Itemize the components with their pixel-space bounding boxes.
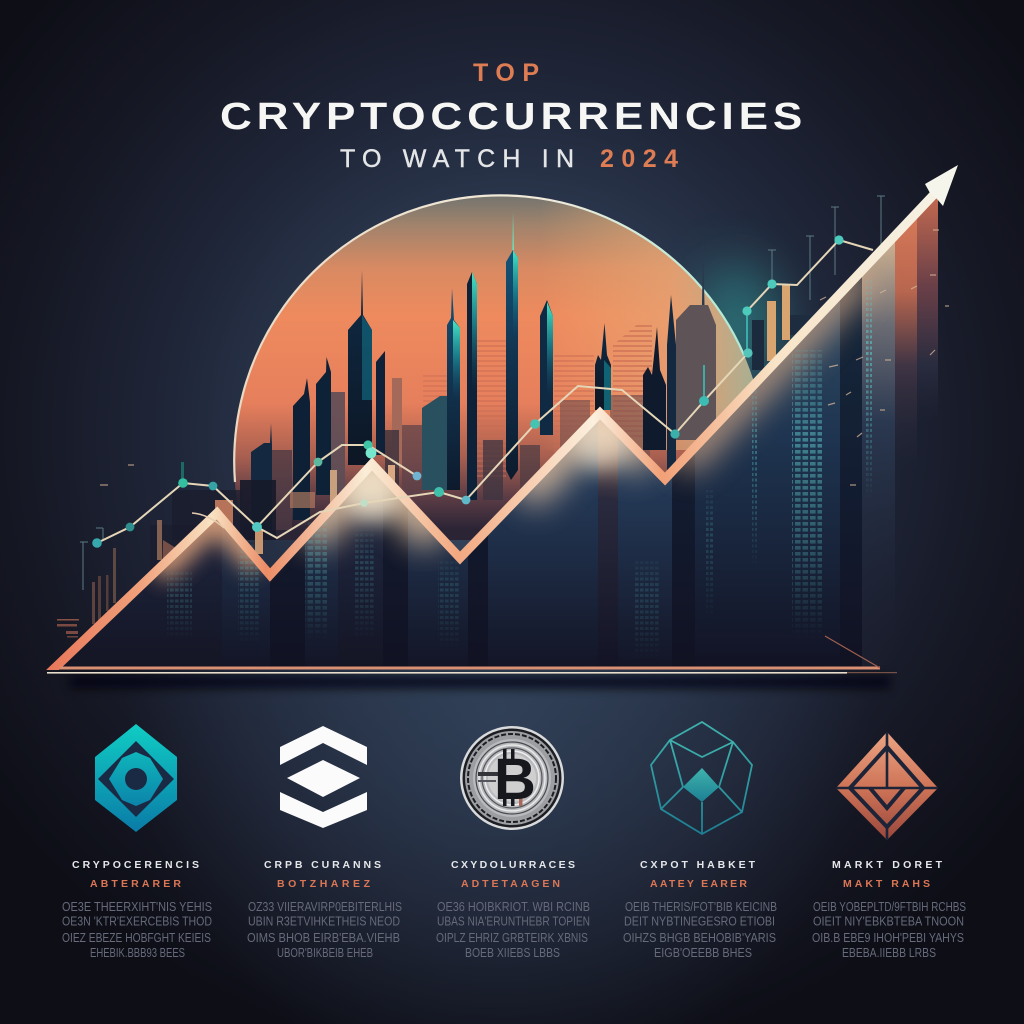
body copy: OIEIT NIY'EBKBTEBA TNOON <box>813 914 964 928</box>
skyline towers <box>251 212 716 530</box>
icon: teal hexagon <box>95 724 177 832</box>
icon: white chevrons <box>280 726 367 828</box>
window grids <box>167 280 872 660</box>
arrow head <box>925 165 958 206</box>
caption column 2 <box>247 859 402 960</box>
main zigzag line <box>40 188 940 682</box>
sun disc <box>230 190 760 540</box>
thin gauge lines <box>80 196 885 590</box>
body copy: EBEBA.IIEBB LRBS <box>842 945 936 960</box>
heading: MARKT DORET <box>832 859 943 871</box>
body copy: OEIB THERIS/FOT'BIB KEICINB <box>625 899 777 914</box>
body copy: OE3E THEERXIHT'NIS YEHIS <box>62 899 212 914</box>
heading: CRPB CURANNS <box>264 859 381 871</box>
icon row <box>95 722 938 840</box>
body copy: EHEBIK.BBB93 BEES <box>90 945 185 960</box>
body copy: OIB.B EBE9 IHOH'PEBI YAHYS <box>812 930 964 945</box>
left dark city <box>57 462 395 638</box>
sparks <box>100 230 949 485</box>
icon: silver bitcoin coin <box>460 726 564 830</box>
subheading: BOTZHAREZ <box>277 878 371 890</box>
heading: CXYDOLURRACES <box>451 859 575 871</box>
baseline rules <box>47 636 897 674</box>
teal glow behind sun <box>698 263 778 387</box>
subtitle year: 2024 <box>600 145 678 173</box>
caption column 5 <box>812 859 966 960</box>
body copy <box>62 899 212 960</box>
subheading: AATEY EARER <box>650 878 747 890</box>
subheading: ABTERARER <box>90 878 181 890</box>
icon: teal polyhedron <box>651 722 752 834</box>
body copy: BOEB XIIEBS LBBS <box>465 945 560 960</box>
body copy <box>623 899 777 960</box>
body copy: OE3N 'KTR'EXERCEBIS THOD <box>62 914 212 928</box>
body copy: OZ33 VIIERAVIRP0EBITERLHIS <box>248 899 402 914</box>
icon: copper diamond <box>836 732 938 840</box>
body copy: DEIT NYBTINEGESRO ETIOBI <box>624 914 775 928</box>
icon: silver bitcoin coin: B <box>494 747 536 812</box>
body copy <box>247 899 402 960</box>
body copy: OEIB YOBEPLTD/9FTBIH RCHBS <box>813 899 966 914</box>
faint city <box>272 322 652 530</box>
body copy: OIHZS BHGB BEHOBIB'YARIS <box>623 930 776 945</box>
body copy: EIGB'OEEBB BHES <box>654 945 752 960</box>
subheading: MAKT RAHS <box>843 878 930 890</box>
area under line <box>138 198 938 666</box>
main rising line <box>40 165 958 682</box>
body copy: OIMS BHOB EIRB'EBA.VIEHB <box>247 930 400 945</box>
body copy: OE36 HOIBKRIOT. WBI RCINB <box>437 899 590 914</box>
heading: CXPOT HABKET <box>640 859 756 871</box>
sun outline <box>234 195 744 482</box>
caption column 4 <box>623 859 777 960</box>
title block <box>220 59 802 173</box>
body copy: UBAS NIA'ERUNTHEBR TOPIEN <box>437 914 590 928</box>
body copy: OIEZ EBEZE HOBFGHT KEIEIS <box>62 930 211 945</box>
body copy <box>436 899 590 960</box>
body copy: UBIN R3ETVIHKETHEIS NEOD <box>248 914 400 928</box>
title: top: TOP <box>473 59 539 87</box>
subheading: ADTETAAGEN <box>461 878 560 890</box>
subtitle: TO WATCH IN <box>340 145 574 173</box>
baseline shadow <box>70 676 890 688</box>
body copy: OIPLZ EHRIZ GRBTEIRK XBNIS <box>436 930 588 945</box>
heading: CRYPOCERENCIS <box>72 859 199 871</box>
body copy <box>812 899 966 960</box>
chart scene <box>40 165 958 688</box>
caption column 1 <box>62 859 212 960</box>
right tan buildings <box>752 285 812 370</box>
title: cryptoccurrencies: CRYPTOCCURRENCIES <box>220 95 802 137</box>
secondary line with data points <box>92 235 873 548</box>
body copy: UBOR'BIKBEIB EHEB <box>277 945 373 960</box>
caption column 3 <box>436 859 590 960</box>
small curve at first peak <box>192 513 224 528</box>
